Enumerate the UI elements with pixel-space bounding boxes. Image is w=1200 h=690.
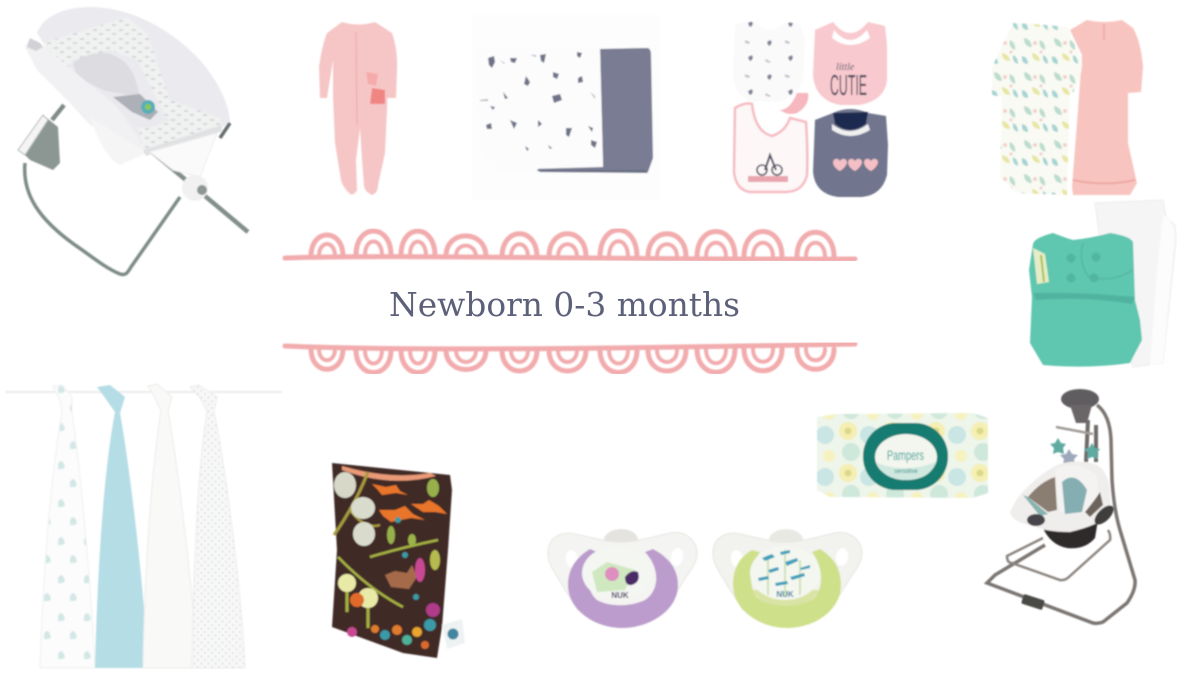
icon: baby sleeper rocker bbox=[18, 7, 248, 275]
icon: baby wipes pack bbox=[817, 413, 988, 498]
title: Newborn 0-3 months bbox=[389, 285, 740, 324]
panel: title band bbox=[285, 230, 855, 372]
icon: pink footed pajama bbox=[319, 22, 397, 195]
icon: swaddle blankets bbox=[472, 15, 660, 200]
icon: green pacifier bbox=[713, 529, 862, 628]
icon: bib set bbox=[733, 22, 888, 197]
icon: baby swing bbox=[987, 389, 1135, 623]
bib text small: little bbox=[836, 62, 855, 73]
pacifier brand: NUK bbox=[611, 591, 629, 600]
icon: cloth diaper and insert bbox=[1029, 200, 1176, 367]
wipes subtitle: sensitive bbox=[894, 469, 918, 475]
icon: woodland wet bag bbox=[332, 463, 465, 658]
icon: muslin swaddles on a rail bbox=[5, 384, 282, 668]
icon: baby gowns bbox=[992, 20, 1143, 195]
top scallop border bbox=[285, 230, 855, 259]
icon: purple pacifier bbox=[548, 529, 697, 628]
wipes brand: Pampers bbox=[887, 447, 924, 463]
pacifier brand: NUK bbox=[776, 590, 794, 599]
bottom scallop border bbox=[285, 344, 855, 372]
icon: bib set: CUTIE bbox=[830, 70, 867, 102]
